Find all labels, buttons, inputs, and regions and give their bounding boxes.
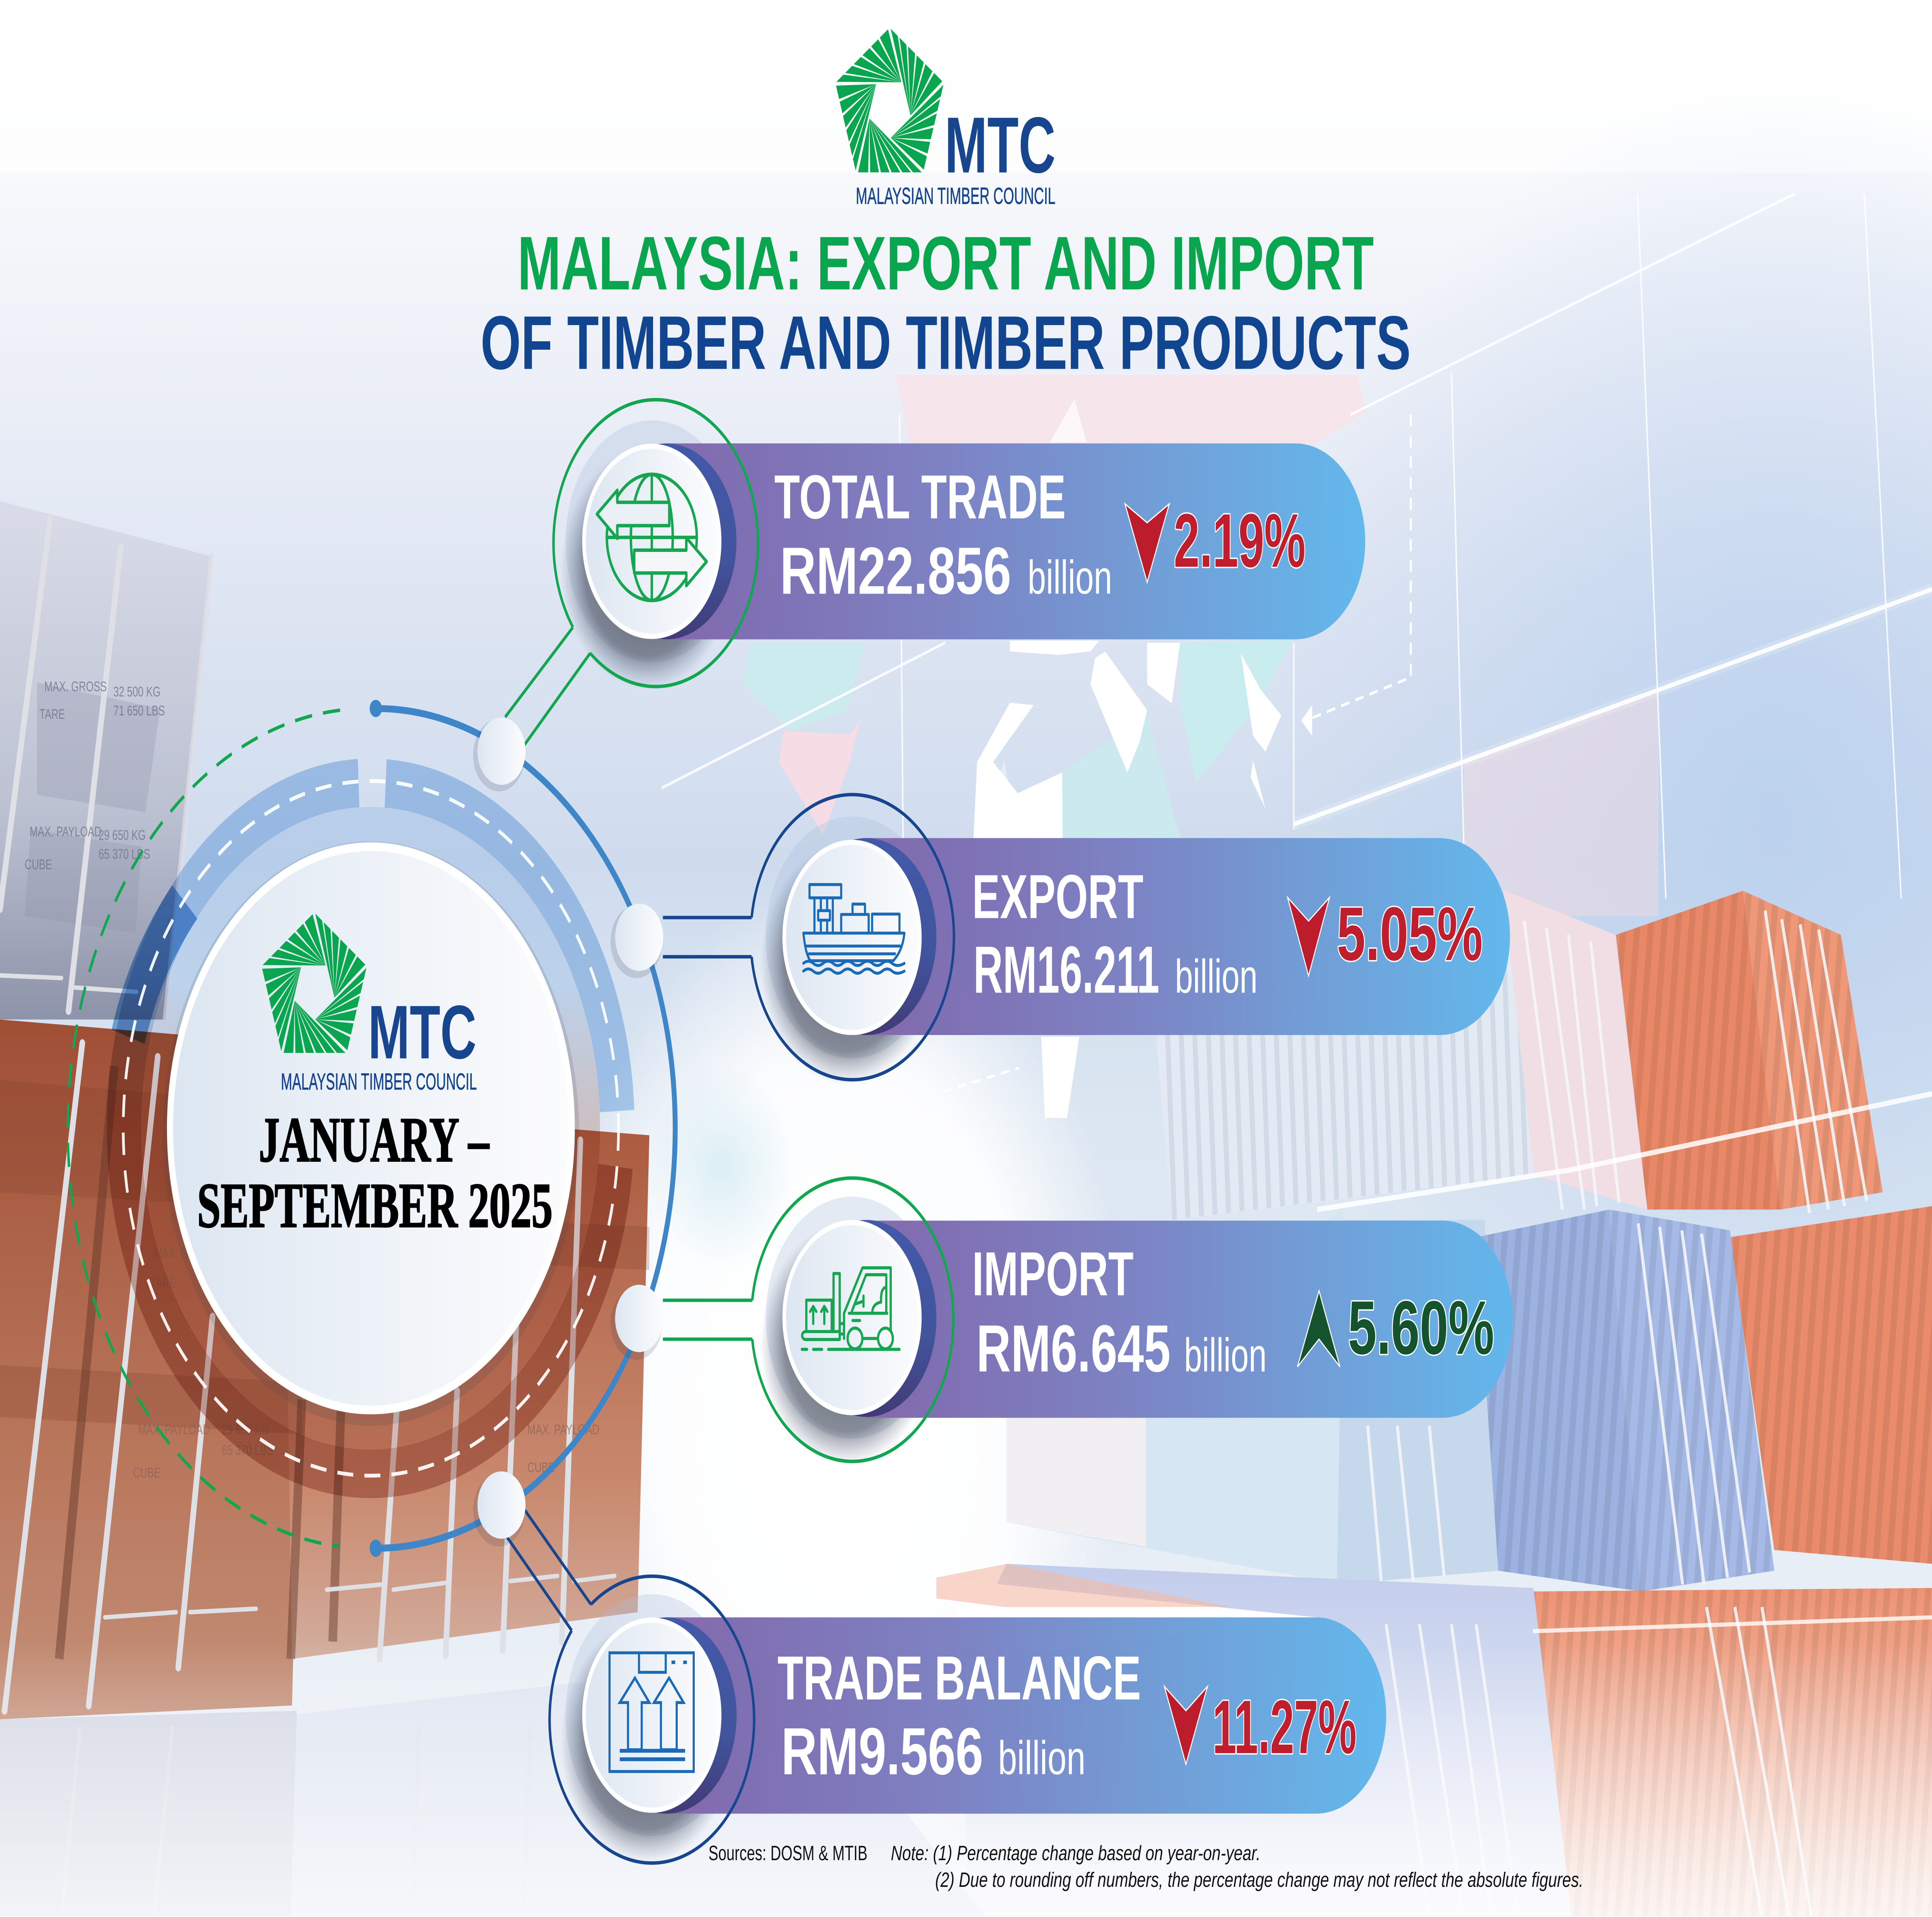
background: world map and shipping containers: MAX. GROSS [154, 1246, 216, 1261]
date text [197, 1105, 553, 1241]
footer: sources and notes [709, 1842, 1583, 1891]
value: export: RM16.211 [973, 932, 1160, 1007]
logo: Malaysian Timber Council (central): MALAYSIAN TIMBER COUNCIL [281, 1069, 477, 1095]
footer: sources and notes: Sources: DOSM & MTIB [709, 1842, 867, 1864]
central date disc [163, 841, 579, 1425]
logo: Malaysian Timber Council (central) [247, 898, 477, 1095]
background: world map and shipping containers: MAX. PAYLOAD [138, 1422, 210, 1437]
value: export: billion [1175, 950, 1257, 1003]
date text: JANUARY – [259, 1105, 490, 1175]
footer: sources and notes: Note: (1) Percentage change based on year-on-year. [891, 1842, 1260, 1864]
value: trade balance [781, 1714, 1085, 1789]
value: import [976, 1311, 1267, 1386]
value: total trade: billion [1027, 551, 1112, 604]
change: down 11.27%: 11.27% [1213, 1685, 1357, 1770]
title [481, 221, 1411, 385]
icon: globe with trade arrows [597, 474, 707, 601]
title: MALAYSIA: EXPORT AND IMPORT [517, 221, 1374, 306]
change: up 5.60%: 5.60% [1348, 1285, 1494, 1371]
background: world map and shipping containers: 29 650 KG [222, 1422, 269, 1437]
background: world map and shipping containers: 65 370 LBS [222, 1442, 273, 1458]
value: trade balance: RM9.566 [781, 1714, 983, 1789]
icon: cargo ship [803, 885, 905, 973]
logo: Malaysian Timber Council (top): MALAYSIAN TIMBER COUNCIL [856, 184, 1056, 209]
background: world map and shipping containers: 32 500 KG [113, 684, 160, 700]
footer: sources and notes: (2) Due to rounding off numbers, the percentage change may not reflect the absolute figures. [935, 1868, 1583, 1891]
background: world map and shipping containers: MAX. PAYLOAD [527, 1422, 599, 1437]
change: down 11.27% [1164, 1685, 1357, 1770]
panel: export [663, 795, 1510, 1085]
background: world map and shipping containers: MAX. GROSS [44, 679, 107, 694]
panel: total trade [505, 400, 1365, 745]
background: world map and shipping containers: CUBE [527, 1460, 555, 1475]
value: total trade [780, 533, 1112, 608]
logo: Malaysian Timber Council (top) [820, 12, 1056, 215]
icon: forklift [802, 1268, 900, 1349]
panel: trade balance [507, 1510, 1386, 1863]
hub rings and timeline arcs [68, 700, 675, 1557]
change: down 5.05%: 5.05% [1337, 892, 1483, 977]
value: import: billion [1184, 1328, 1267, 1382]
background: world map and shipping containers: MAX. PAYLOAD [30, 824, 102, 839]
logo: Malaysian Timber Council (central): MTC [368, 990, 476, 1075]
label: import: IMPORT [972, 1239, 1134, 1309]
date text: SEPTEMBER 2025 [197, 1170, 553, 1241]
background: world map and shipping containers: TARE [39, 707, 65, 722]
label: total trade: TOTAL TRADE [774, 462, 1066, 532]
icon: box with this-way-up arrows [609, 1653, 694, 1772]
label: export: EXPORT [972, 861, 1143, 931]
background: world map and shipping containers: CUBE [133, 1465, 160, 1481]
background: world map and shipping containers: 29 650 KG [99, 827, 146, 843]
value: total trade: RM22.856 [780, 533, 1011, 608]
label: trade balance: TRADE BALANCE [777, 1643, 1141, 1713]
logo: Malaysian Timber Council (top): MTC [945, 100, 1056, 189]
change: down 2.19% [1125, 498, 1306, 583]
background: world map and shipping containers: TARE [150, 1275, 176, 1290]
change: down 2.19%: 2.19% [1174, 498, 1306, 583]
value: trade balance: billion [998, 1731, 1085, 1784]
connector nodes [473, 717, 663, 1546]
title: OF TIMBER AND TIMBER PRODUCTS [481, 300, 1411, 385]
background: world map and shipping containers: CUBE [25, 857, 52, 872]
background: world map and shipping containers: 71 650 LBS [113, 703, 165, 718]
panel: import [663, 1178, 1513, 1465]
value: import: RM6.645 [976, 1311, 1170, 1386]
background: world map and shipping containers: 65 370 LBS [99, 846, 150, 862]
